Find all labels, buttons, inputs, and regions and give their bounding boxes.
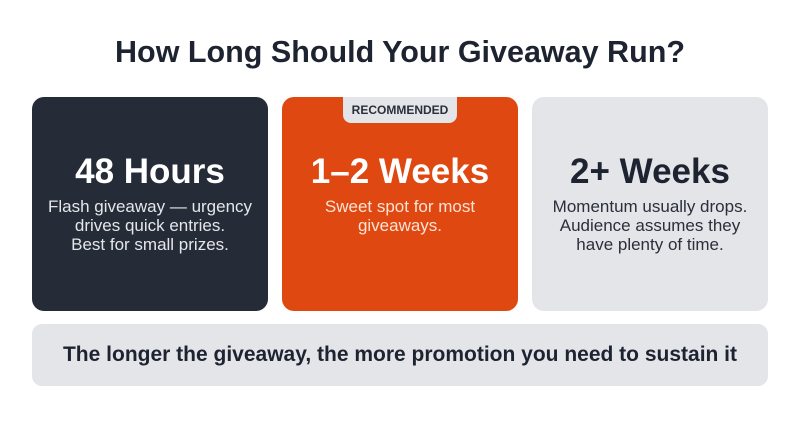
text: 2+ weeks description: Audience assumes they [560,216,740,235]
callout bar [32,324,768,386]
badge: recommended [343,97,457,123]
text: 48 hours description [48,197,252,254]
heading: 2+ weeks: 2+ Weeks [570,152,730,191]
heading: 1-2 weeks: 1–2 Weeks [311,152,489,191]
text: 2+ weeks description [553,197,747,254]
text: 48 hours description: Best for small prizes. [71,235,229,254]
heading: 48 hours: 48 Hours [75,152,225,191]
panel: 48 hours [32,97,268,311]
callout bar: The longer the giveaway, the more promotion you need to sustain it [63,343,737,366]
text: 48 hours description: Flash giveaway — urgency [48,197,252,216]
text: 1-2 weeks description [325,197,475,235]
text: 2+ weeks description: have plenty of time. [576,235,724,254]
text: 2+ weeks description: Momentum usually drops. [553,197,747,216]
panel: 2+ weeks [532,97,768,311]
text: 1-2 weeks description: Sweet spot for most [325,197,475,216]
text: 48 hours description: drives quick entries. [75,216,225,235]
panel: 1-2 weeks [282,97,518,311]
text: 1-2 weeks description: giveaways. [358,216,442,235]
title: How Long Should Your Giveaway Run? [115,35,685,69]
badge: recommended: RECOMMENDED [352,103,448,117]
